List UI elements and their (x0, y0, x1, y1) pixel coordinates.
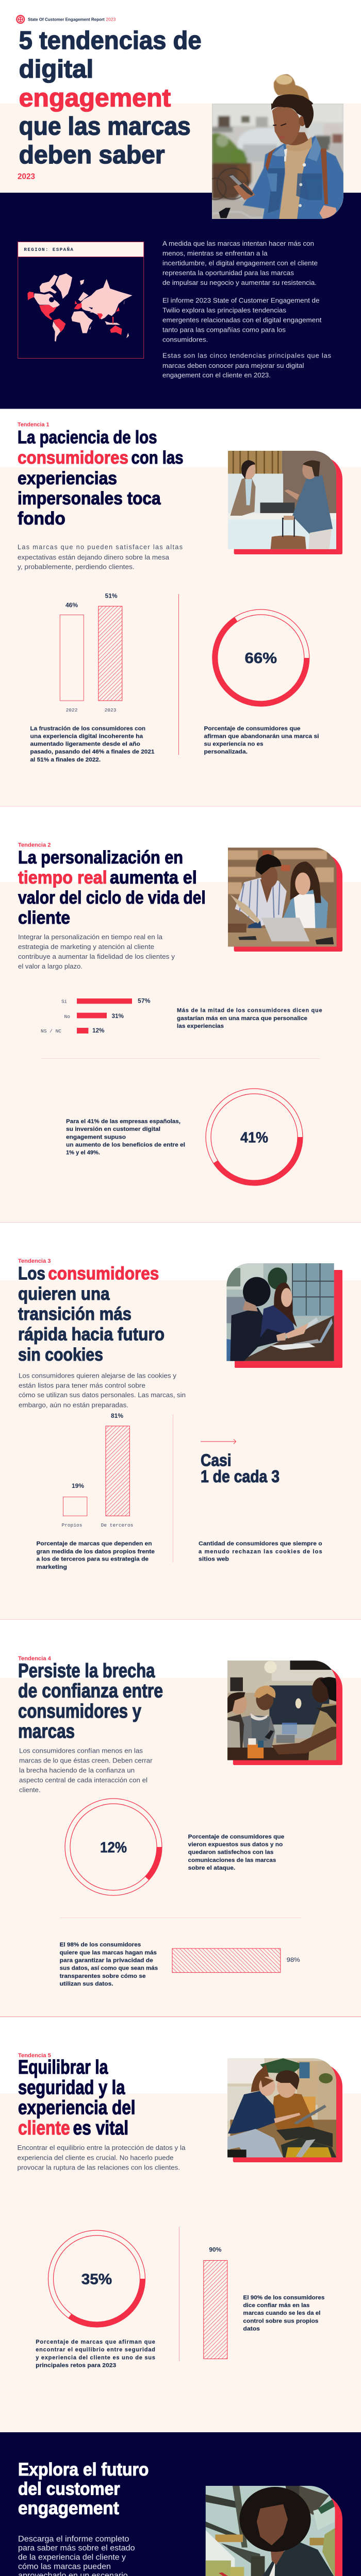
bar caption: a los de terceros para su estrategia de (36, 1556, 149, 1563)
intro text: Estas son las cinco tendencias principales que las (162, 352, 331, 360)
bar de terceros (106, 1426, 129, 1516)
title: engagement (19, 84, 171, 112)
trend 3 heading: transición más (18, 1304, 132, 1324)
trend 4 heading: de confianza entre (18, 1681, 163, 1702)
closing heading: engagement (18, 2498, 119, 2518)
panel: trend 1 background (0, 467, 361, 806)
trend 5 heading: es vital (73, 2117, 128, 2139)
ring caption: principales retos para 2023 (36, 2363, 116, 2369)
photo: woman at bus stop with red offset (206, 2486, 342, 2576)
trend 2 heading: aumenta el (110, 868, 197, 888)
ring caption (66, 1118, 185, 1156)
ring caption: comunicaciones de las marcas (188, 1857, 276, 1863)
intro text: incertidumbre, el digital engagement con el cliente (162, 259, 318, 267)
intro text: engagement con el cliente en 2023. (162, 371, 271, 379)
title: deben saber (19, 141, 165, 169)
ring caption: y experiencia del cliente es uno de sus (36, 2354, 155, 2361)
bar caption (36, 1540, 155, 1570)
bar 12% (77, 1028, 88, 1033)
ring chart: 66% (212, 609, 309, 706)
bar 2022 (60, 615, 84, 701)
trend 4 body text: marcas de lo que éstas creen. Deben cerrar (19, 1757, 153, 1764)
bar caption (60, 1942, 158, 1987)
year: 2023 (18, 172, 35, 181)
ring caption: Para el 41% de las empresas españolas, (66, 1118, 180, 1125)
trend 5 heading: experiencia del (18, 2097, 135, 2119)
bar caption: marcas cuando se les da el (243, 2310, 320, 2316)
trend 1 body text: Las marcas que no pueden satisfacer las altas (18, 544, 183, 551)
trend 1 chart caption (30, 725, 155, 763)
panel: hero cream band (0, 104, 361, 193)
intro text: tanto para las compañías como para los (162, 326, 286, 334)
intro text: Twilio explora las principales tendencias (162, 306, 287, 314)
trend 5 body text: provocar la ruptura de las relaciones con los clientes. (18, 2164, 180, 2172)
stat: casi 1 de cada 3: Casi (201, 1450, 232, 1469)
bar chart: frustration 2022 vs 2023: 2023 (105, 707, 117, 713)
trend 3 heading: rápida hacia futuro (18, 1324, 165, 1345)
stat caption: sitios web (199, 1556, 229, 1563)
trend 5 body text: experiencia del cliente es crucial. No hacerlo puede (18, 2154, 173, 2161)
bar chart: frustration 2022 vs 2023: 51% (105, 592, 118, 600)
title (19, 27, 202, 169)
bar chart: first party vs third party data (62, 1412, 133, 1528)
photo: two women at shop laptop with red offset (228, 848, 342, 952)
trend 4 body text: la brecha haciendo de la confianza un (19, 1767, 135, 1774)
trend 3 heading (18, 1264, 165, 1365)
trend 1 label: Tendencia 1 (18, 422, 50, 428)
photo: friends at coffee shop with red offset (227, 1660, 342, 1765)
trend 4 body text: Los consumidores confían menos en las (19, 1748, 143, 1755)
trend 2 body text (18, 934, 175, 970)
trend 1 chart caption: aumentado ligeramente desde el año (30, 741, 140, 747)
world map (27, 274, 133, 342)
trend 1 heading: impersonales toca (18, 488, 161, 509)
trend 5 heading: cliente (18, 2117, 70, 2139)
trend 2 body text: Integrar la personalización en tiempo real en la (18, 934, 162, 941)
intro text: de impulsar su negocio y aumentar su resistencia. (162, 279, 317, 286)
trend 3 heading: quieren una (18, 1284, 110, 1304)
panel: intro navy background (0, 193, 361, 409)
region header: REGION: ESPAÑA (24, 247, 73, 252)
ring caption: un aumento de los beneficios de entre el (66, 1142, 185, 1148)
bar caption: Más de la mitad de los consumidores dicen que (177, 1007, 322, 1013)
bar caption: transparentes sobre cómo se (60, 1973, 146, 1979)
intro text: El informe 2023 State of Customer Engagement de (162, 297, 320, 304)
trend 3 heading: consumidores (48, 1264, 159, 1284)
trend 3 heading: Los (18, 1264, 45, 1284)
ring caption: quedaron satisfechos con las (188, 1850, 273, 1856)
trend 1 chart caption: pasado, pasando del 46% a finales de 2021 (30, 749, 155, 755)
bar chart: 90% (204, 2246, 227, 2359)
bar chart: 98%: 98% (287, 1956, 300, 1963)
intro text: marcas deben conocer para mejorar su digital (162, 362, 304, 369)
trend 1 heading: experiencias (18, 468, 117, 488)
trend 5 label: Tendencia 5 (18, 2053, 51, 2059)
ring caption: engagement supuso (66, 1134, 126, 1141)
intro text: menos, mientras se enfrentan a la (162, 249, 268, 257)
ring chart: 12% (65, 1799, 162, 1895)
ring chart: 41%: 41% (240, 1129, 268, 1146)
bar chart: 98% (172, 1948, 300, 1973)
trend 1 chart caption: al 51% a finales de 2022. (30, 757, 101, 763)
closing heading (18, 2460, 149, 2518)
ring caption: afirman que abandonarán una marca si (204, 734, 319, 740)
bar 57% (77, 998, 132, 1004)
bar caption: dice confiar más en las (243, 2302, 309, 2309)
bar caption: Porcentaje de marcas que dependen en (36, 1540, 152, 1547)
ring caption: su experiencia no es (204, 741, 263, 747)
trend 3 body text: embargo, aún no están preparadas. (19, 1402, 128, 1409)
trend 2 heading: cliente (18, 908, 70, 928)
trend 2 heading: La personalización en (18, 848, 183, 868)
photo: woman with phone and bicycle (205, 74, 343, 221)
trend 1 heading: con las (131, 448, 184, 468)
bar chart: spend more for personalization: 57% (138, 997, 151, 1005)
bar chart: spend more for personalization: NS / NC (41, 1028, 61, 1034)
report header (16, 15, 116, 24)
ring caption: su inversión en customer digital (66, 1126, 160, 1132)
trend 1 body text: expectativas están dejando dinero sobre la mesa (18, 554, 169, 561)
stat caption: Cantidad de consumidores que siempre o (199, 1540, 322, 1547)
trend 2 label: Tendencia 2 (18, 842, 51, 848)
stat caption: a menudo rechazan las cookies de los (199, 1549, 322, 1555)
ring chart: 66%: 66% (245, 650, 277, 667)
bar chart: first party vs third party data: De terceros (101, 1522, 133, 1528)
ring chart: 35%: 35% (81, 2271, 112, 2287)
bar caption: gastarían más en una marca que personalice (177, 1015, 307, 1022)
ring caption: encontrar el equilibrio entre seguridad (36, 2347, 155, 2353)
bar chart: first party vs third party data: 81% (111, 1412, 123, 1419)
bar chart: spend more for personalization (41, 997, 151, 1034)
intro text: consumidores. (162, 335, 208, 343)
closing body text: de la experiencia del cliente y (18, 2553, 126, 2562)
ring caption: Porcentaje de consumidores que (204, 725, 300, 732)
panel: trend 3 background (0, 1280, 361, 1619)
trend 5 heading: seguridad y la (18, 2077, 125, 2098)
bar caption: quiere que las marcas hagan más (60, 1950, 157, 1956)
photo: two women in meeting room with red offset (226, 1263, 342, 1368)
trend 2 heading (18, 848, 206, 928)
bar chart: first party vs third party data: 19% (72, 1482, 84, 1489)
closing body text: cómo las marcas pueden (18, 2562, 111, 2571)
ring caption: vieron expuestos sus datos y no (188, 1841, 283, 1848)
bar caption (177, 1007, 322, 1029)
ring caption: Porcentaje de consumidores que (188, 1834, 284, 1840)
closing heading: del customer (18, 2479, 120, 2499)
trend 2 heading: valor del ciclo de vida del (18, 888, 206, 908)
closing heading: Explora el futuro (18, 2460, 149, 2480)
bar caption (243, 2295, 324, 2332)
trend 3 body text: están listos para tener más control sobre (19, 1382, 145, 1389)
trend 3 heading: sin cookies (18, 1345, 103, 1365)
panel: trend 4 background (0, 1678, 361, 2016)
arrow (201, 1439, 236, 1444)
ring caption: personalizada. (204, 749, 248, 755)
bar caption: las experiencias (177, 1023, 224, 1029)
intro text (162, 240, 331, 379)
ring caption (204, 725, 319, 755)
panel: closing navy background (0, 2432, 361, 2576)
trend 4 label: Tendencia 4 (18, 1655, 52, 1662)
bar chart: first party vs third party data: Propios (62, 1522, 82, 1528)
trend 4 body text: aspecto central de cada interacción con el (19, 1776, 147, 1784)
bar 31% (77, 1013, 107, 1018)
bar chart: spend more for personalization: 12% (92, 1027, 105, 1034)
bar caption: datos (243, 2326, 260, 2332)
trend 4 body text (19, 1748, 153, 1794)
hair bun above the photo (271, 74, 314, 111)
trend 3 label: Tendencia 3 (18, 1258, 51, 1264)
photo: couple on floor with tablet with red offset (227, 2058, 342, 2162)
trend 1 body text: y, probablemente, perdiendo clientes. (18, 564, 135, 571)
trend 4 heading: consumidores y (18, 1701, 141, 1722)
bar caption: El 98% de los consumidores (60, 1942, 141, 1948)
stat caption (199, 1540, 322, 1563)
title: que las marcas (19, 113, 191, 141)
ring caption: Porcentaje de marcas que afirman que (36, 2339, 155, 2345)
trend 1 heading: La paciencia de los (18, 428, 157, 448)
trend 5 body text (18, 2144, 186, 2172)
bar caption: sus datos, así como que sean más (60, 1965, 158, 1972)
intro text: emergentes relacionadas con el digital engagement (162, 316, 322, 324)
bar chart: frustration 2022 vs 2023: 2022 (66, 707, 78, 713)
bar chart: frustration 2022 vs 2023: 46% (65, 602, 78, 609)
title: digital (19, 55, 93, 83)
panel: trend 5 background (0, 2093, 361, 2432)
trend 4 heading: marcas (18, 1721, 75, 1742)
bar chart: spend more for personalization: Sí (61, 999, 67, 1005)
bar chart: spend more for personalization: No (64, 1014, 70, 1020)
closing body text: para saber más sobre el estado (18, 2544, 135, 2553)
bar caption: utilizan sus datos. (60, 1981, 113, 1987)
trend 1 heading: fondo (18, 509, 65, 529)
bar chart: frustration 2022 vs 2023 (60, 592, 122, 713)
trend 5 heading (18, 2057, 135, 2139)
photo: hotel reception with red offset (228, 451, 342, 554)
trend 3 body text: cómo se utilizan sus datos personales. Las marcas, sin (19, 1392, 186, 1399)
stat: casi 1 de cada 3: 1 de cada 3 (201, 1467, 280, 1486)
trend 1 heading: consumidores (18, 448, 128, 468)
trend 1 body text (18, 544, 183, 571)
title: 5 tendencias de (19, 27, 202, 55)
ring chart: 41% (206, 1089, 303, 1185)
bar caption: gran medida de los datos propios frente (36, 1549, 155, 1555)
trend 2 body text: contribuye a aumentar la fidelidad de los clientes y (18, 953, 175, 960)
trend 4 heading (18, 1660, 163, 1742)
trend 2 body text: estrategia de marketing y atención al cliente (18, 943, 154, 951)
report year: 2023 (106, 17, 116, 22)
closing body text: Descarga el informe completo (18, 2535, 129, 2544)
ring chart: 12%: 12% (100, 1839, 127, 1856)
trend 2 body text: el valor a largo plazo. (18, 963, 83, 970)
trend 1 chart caption: La frustración de los consumidores con (30, 725, 145, 732)
trend 3 body text (19, 1372, 186, 1409)
region header (18, 242, 144, 257)
trend 1 heading (18, 428, 184, 529)
bar chart: spend more for personalization: 31% (111, 1012, 124, 1020)
bar 2023 (99, 606, 122, 701)
trend 5 heading: Equilibrar la (18, 2057, 108, 2078)
trend 3 body text: Los consumidores quieren alejarse de las cookies y (19, 1372, 177, 1380)
intro text: A medida que las marcas intentan hacer más con (162, 240, 314, 247)
trend 1 chart caption: una experiencia digital incoherente ha (30, 734, 143, 740)
trend 5 body text: Encontrar el equilibrio entre la protección de datos y la (18, 2144, 186, 2151)
ring caption (188, 1834, 284, 1871)
report name: State Of Customer Engagement Report (28, 17, 105, 22)
intro text: representa la oportunidad para las marcas (162, 269, 294, 277)
icon: twilio logo red (16, 15, 25, 24)
bar caption: marketing (36, 1564, 67, 1570)
trend 4 heading: Persiste la brecha (18, 1660, 155, 1682)
panel: trend 2 background (0, 882, 361, 1222)
stat: casi 1 de cada 3 (201, 1450, 280, 1486)
bar caption: El 90% de los consumidores (243, 2295, 324, 2301)
closing body text (18, 2535, 135, 2576)
panel: region map (18, 242, 144, 359)
bar propios (63, 1497, 87, 1516)
ring caption (36, 2339, 155, 2369)
ring chart: 35% (48, 2230, 145, 2327)
trend 4 body text: cliente. (19, 1787, 41, 1794)
bar chart: 90%: 90% (209, 2246, 222, 2253)
ring caption: sobre el ataque. (188, 1865, 235, 1871)
ring caption: 1% y el 49%. (66, 1150, 100, 1156)
bar caption: para garantizar la privacidad de (60, 1958, 153, 1964)
trend 2 heading: tiempo real (18, 868, 107, 888)
bar caption: control sobre sus propios (243, 2318, 318, 2325)
